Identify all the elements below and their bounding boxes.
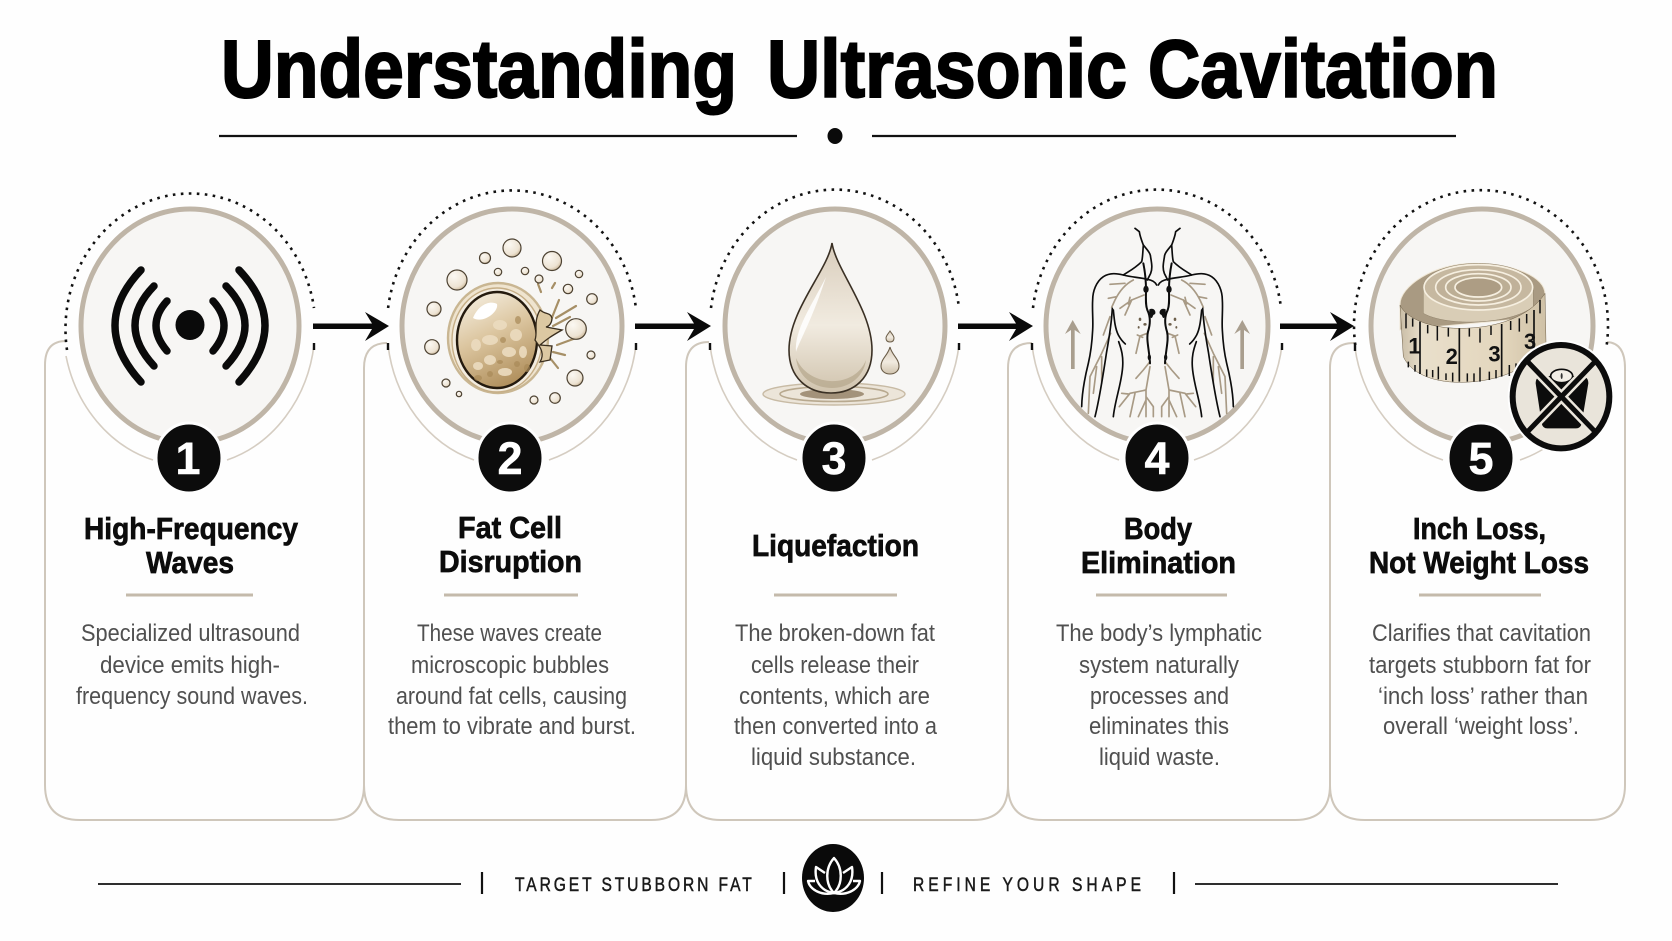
body text 5: ‘inch loss’ rather than bbox=[1378, 683, 1588, 710]
badge 5 bbox=[1448, 423, 1514, 493]
heading 2: Disruption bbox=[439, 544, 582, 579]
panel: step 3 liquefaction bbox=[686, 190, 1008, 820]
body text 1: frequency sound waves. bbox=[76, 683, 308, 710]
tape numbers: 3 bbox=[1524, 329, 1536, 354]
card outline 3 bbox=[686, 342, 1008, 820]
arrow: step 1 to 2 bbox=[313, 312, 389, 341]
tape numbers bbox=[1408, 329, 1536, 369]
heading 1: Waves bbox=[146, 545, 234, 580]
icon: crossed-out scale bbox=[1508, 340, 1614, 453]
card outline 4 bbox=[1008, 343, 1330, 820]
body text 2: microscopic bubbles bbox=[411, 652, 609, 679]
body text 4: system naturally bbox=[1079, 652, 1240, 679]
badge 1 bbox=[156, 423, 222, 493]
heading 1 bbox=[84, 511, 299, 580]
arrow: step 3 to 4 bbox=[958, 312, 1033, 341]
title bbox=[221, 24, 1498, 115]
back of band bbox=[1400, 263, 1545, 330]
badge 2 bbox=[477, 423, 543, 493]
footer band bbox=[98, 844, 1558, 912]
title divider bbox=[219, 128, 1456, 144]
footer text left: TARGET STUBBORN FAT bbox=[515, 873, 752, 895]
arrow: step 4 to 5 bbox=[1280, 312, 1354, 341]
body text 3: liquid substance. bbox=[751, 744, 916, 771]
badge 4 bbox=[1124, 423, 1190, 493]
panel: step 4 body elimination bbox=[1008, 190, 1330, 820]
body text 3: then converted into a bbox=[734, 713, 937, 740]
body text 5 bbox=[1369, 620, 1591, 740]
body text 3: contents, which are bbox=[739, 683, 930, 710]
body text 3 bbox=[734, 620, 937, 771]
panel: step 2 fat cell disruption bbox=[364, 190, 686, 820]
image ring 1 bbox=[65, 193, 314, 460]
heading 4 bbox=[1081, 511, 1236, 580]
tape numbers: 2 bbox=[1446, 344, 1458, 369]
body text 1: Specialized ultrasound bbox=[81, 620, 300, 647]
image ring 5 bbox=[1354, 190, 1608, 460]
icon: sound waves bbox=[115, 270, 265, 382]
image ring 4 bbox=[1032, 190, 1282, 460]
icon: lymphatic system bbox=[1065, 228, 1250, 417]
body text 2 bbox=[388, 620, 636, 740]
heading 1: High-Frequency bbox=[84, 511, 299, 546]
body text 4: liquid waste. bbox=[1099, 744, 1220, 771]
icon: lotus badge bbox=[802, 844, 864, 912]
body text 1: device emits high- bbox=[100, 652, 280, 679]
heading 3: Liquefaction bbox=[752, 528, 919, 563]
body text 2: These waves create bbox=[417, 620, 602, 647]
splash burst bbox=[538, 283, 576, 368]
image ring 2 bbox=[388, 190, 636, 460]
badge 3: 3 bbox=[821, 433, 847, 484]
arrow: step 2 to 3 bbox=[635, 312, 711, 341]
title: Cavitation bbox=[1148, 24, 1498, 115]
heading 2: Fat Cell bbox=[458, 510, 562, 545]
heading 4: Body bbox=[1124, 511, 1193, 546]
tape numbers: 1 bbox=[1408, 333, 1421, 358]
cell membrane bbox=[448, 283, 548, 393]
heading 4: Elimination bbox=[1081, 545, 1236, 580]
card outline 1 bbox=[45, 341, 364, 820]
body text 2: around fat cells, causing bbox=[396, 683, 627, 710]
badge 4: 4 bbox=[1144, 433, 1170, 484]
body text 1 bbox=[76, 620, 308, 710]
badge 2: 2 bbox=[497, 433, 523, 484]
heading 5 bbox=[1369, 511, 1589, 580]
badge 1: 1 bbox=[175, 433, 201, 484]
heading 5: Not Weight Loss bbox=[1369, 545, 1589, 580]
image ring 3 bbox=[710, 190, 959, 460]
body text 4: processes and bbox=[1090, 683, 1229, 710]
card outline 2 bbox=[364, 343, 686, 820]
badge 3 bbox=[801, 423, 867, 493]
icon: measuring tape bbox=[1400, 263, 1546, 382]
heading 5: Inch Loss, bbox=[1413, 511, 1546, 546]
body text 3: The broken-down fat bbox=[735, 620, 935, 647]
panel: step 1 high-frequency waves bbox=[45, 193, 364, 820]
icon: liquid droplet bbox=[763, 243, 905, 405]
title: Understanding bbox=[221, 24, 737, 115]
body text 4: eliminates this bbox=[1089, 713, 1229, 740]
body text 2: them to vibrate and burst. bbox=[388, 713, 636, 740]
inner coil bbox=[1423, 263, 1533, 322]
body text 4: The body’s lymphatic bbox=[1056, 620, 1262, 647]
card outline 5 bbox=[1330, 342, 1625, 820]
front band bbox=[1400, 293, 1546, 382]
body text 3: cells release their bbox=[751, 652, 919, 679]
panel: step 5 inch loss bbox=[1330, 190, 1625, 820]
bubbles bbox=[425, 239, 597, 404]
icon: bursting fat cell bbox=[425, 239, 597, 404]
title: Ultrasonic bbox=[767, 24, 1127, 115]
body text 5: targets stubborn fat for bbox=[1369, 652, 1591, 679]
body text 5: overall ‘weight loss’. bbox=[1383, 713, 1579, 740]
tape numbers: 3 bbox=[1488, 342, 1501, 367]
body text 5: Clarifies that cavitation bbox=[1372, 620, 1591, 647]
footer text right: REFINE YOUR SHAPE bbox=[913, 873, 1141, 895]
body text 4 bbox=[1056, 620, 1262, 771]
badge 5: 5 bbox=[1468, 433, 1494, 484]
heading 2 bbox=[439, 510, 582, 579]
